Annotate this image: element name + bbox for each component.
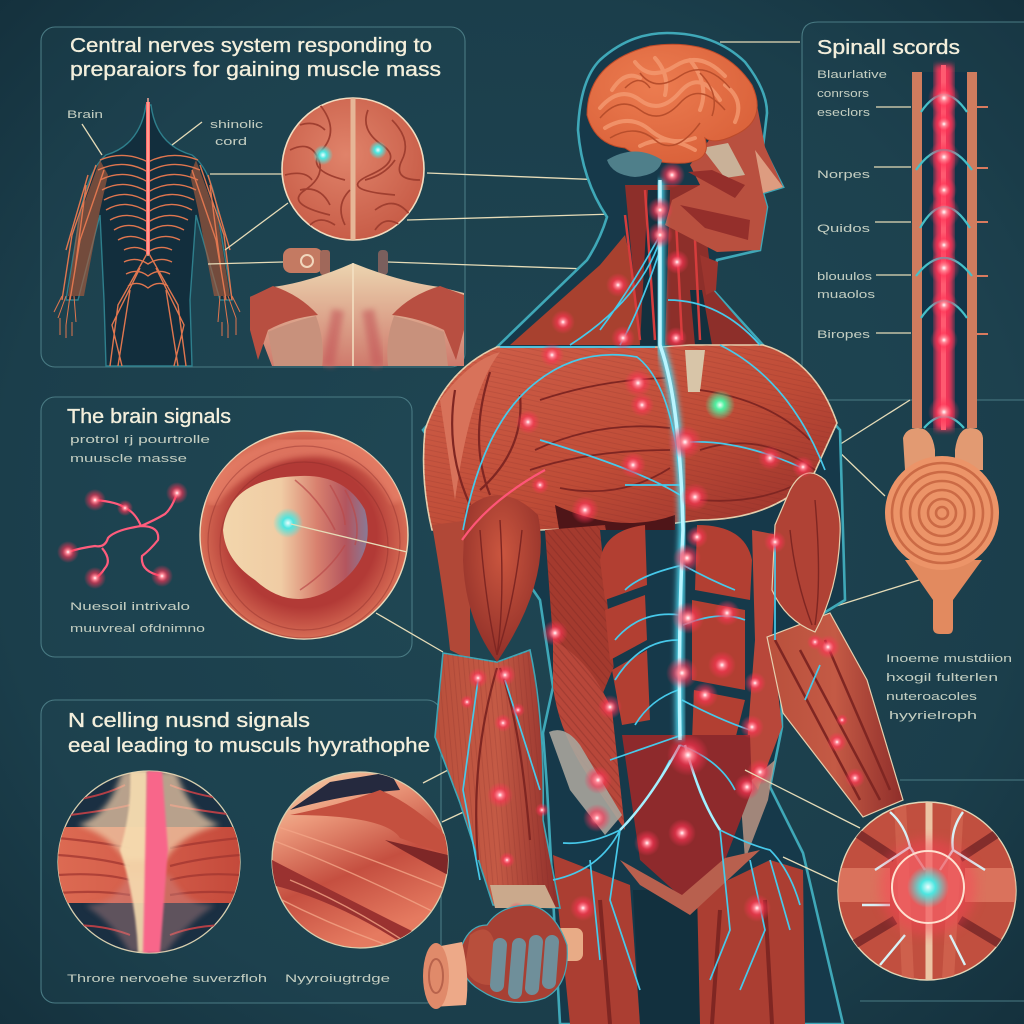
small connector	[283, 248, 388, 275]
caption: Nuesoil intrivalo	[70, 601, 190, 613]
legs	[553, 855, 805, 1024]
left arm	[432, 495, 560, 908]
subheading: protrol rj pourtrolle	[70, 434, 210, 446]
labels: Norpes	[817, 169, 871, 181]
labels: blouulos	[817, 271, 873, 283]
labels: Blaurlative	[817, 69, 887, 81]
face	[665, 105, 783, 295]
leader lines to figure	[388, 42, 935, 822]
muscle circle left	[58, 771, 240, 953]
caption: increase in muscle	[886, 653, 1012, 722]
labels: Quidos	[817, 223, 871, 235]
label: cord: cord	[215, 136, 247, 148]
panel: central nervous system	[41, 27, 465, 367]
signal network	[57, 482, 188, 589]
panel: brain signals	[41, 397, 443, 657]
brain	[587, 44, 757, 163]
main figure	[423, 33, 903, 1024]
caption: increase in muscle: nuteroacoles	[886, 691, 978, 703]
heading: Spinall scords	[817, 37, 960, 59]
brain close-up	[282, 98, 424, 242]
subheading line two: muuscle masse	[70, 453, 187, 465]
labels: conrsors	[817, 88, 870, 100]
panel: neural signals hypertrophy	[41, 700, 450, 1003]
caption: increase in muscle: hxogil fulterlen	[886, 672, 998, 684]
labels	[817, 69, 887, 341]
labels: eseclors	[817, 107, 871, 119]
label: brain: Brain	[67, 109, 103, 121]
body silhouette	[423, 33, 845, 1024]
spinal nerve	[462, 180, 720, 830]
labels: Biropes	[817, 329, 871, 341]
serratus and abs	[545, 525, 782, 860]
caption: increase in muscle: Inoeme mustdiion	[886, 653, 1012, 665]
spinal column	[874, 65, 988, 430]
panel: spinal cords	[802, 22, 1024, 430]
hand and dumbbell	[423, 905, 583, 1009]
right arm	[767, 473, 903, 817]
leader lines	[82, 122, 288, 264]
muscle circle right	[272, 772, 450, 948]
panel heading: Central nerves system responding to	[70, 35, 432, 57]
neck muscles	[510, 185, 760, 345]
panel heading line two: preparaiors for gaining muscle mass	[70, 59, 441, 81]
panel: lower right outline	[860, 780, 1024, 1001]
heading: N celling nusnd signals	[68, 710, 310, 732]
muscle cross-section circle	[200, 431, 408, 639]
caption: increase in muscle: hyyrielroph	[889, 710, 977, 722]
neuromuscular junction circle	[838, 802, 1016, 980]
heading line two: eeal leading to musculs hyyrathophe	[68, 735, 430, 757]
caption line two: muuvreal ofdnimno	[70, 623, 205, 635]
caption left: Throre nervoehe suverzfloh	[67, 973, 267, 985]
nervous system figure	[54, 98, 240, 366]
cerebellum	[607, 152, 662, 177]
nerves	[463, 235, 825, 990]
caption right: Nyyroiugtrdge	[285, 973, 390, 985]
heading: The brain signals	[67, 406, 231, 428]
upper back muscles	[250, 263, 464, 366]
signal points	[460, 162, 865, 922]
upper body muscles	[424, 345, 837, 535]
coil organ diagram	[885, 428, 999, 634]
green signal	[705, 390, 735, 420]
pelvis	[620, 735, 760, 915]
label: spinal cord: shinolic	[210, 119, 264, 131]
junction leader	[745, 770, 860, 882]
labels: muaolos	[817, 289, 876, 301]
